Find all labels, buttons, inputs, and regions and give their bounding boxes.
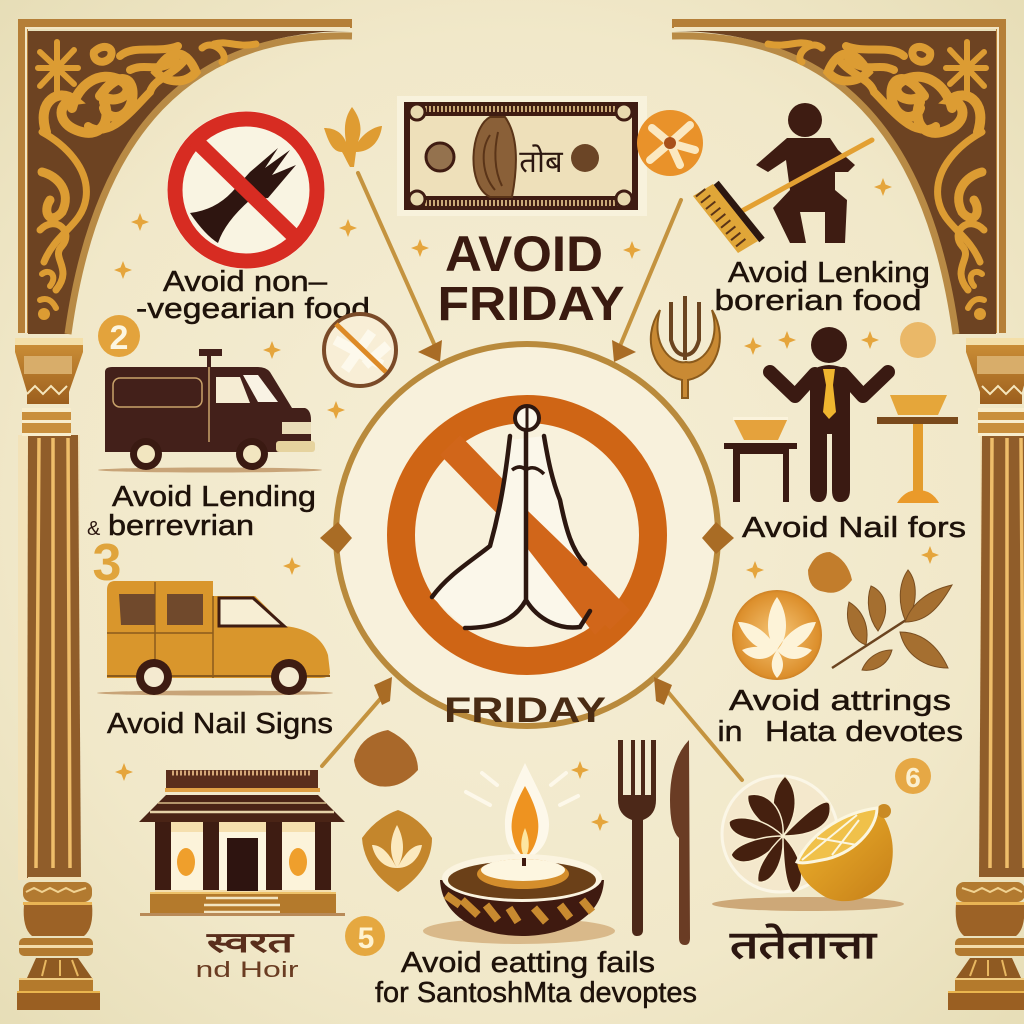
number 2 bbox=[98, 315, 140, 357]
icon: no non-veg fork bbox=[167, 111, 325, 269]
heading: AVOID FRIDAY bbox=[438, 226, 624, 331]
text: devanagari na hair: nd Hoir bbox=[196, 957, 298, 982]
decorative stars bbox=[114, 178, 939, 831]
icon: right table with bowl bbox=[877, 395, 958, 503]
icon: banknote: तोब bbox=[519, 144, 564, 179]
text: avoid lending bbox=[87, 481, 316, 542]
text: devanagari na hair bbox=[196, 927, 298, 982]
number 2: 2 bbox=[110, 319, 128, 357]
icon: no praying hands bbox=[401, 406, 653, 661]
icon: seed bbox=[354, 730, 418, 787]
text: avoid non-vegetarian: -vegearian food bbox=[136, 293, 370, 325]
text: devanagari right: ततेतात्ता bbox=[729, 923, 878, 967]
number 5: 5 bbox=[358, 922, 374, 955]
text: avoid lenking: borerian food bbox=[714, 285, 922, 317]
icon: leafy branch bbox=[832, 570, 952, 670]
icon: lotus badge bbox=[362, 810, 432, 892]
heading: AVOID FRIDAY: FRIDAY bbox=[438, 278, 624, 331]
icon: oil lamp bbox=[423, 763, 615, 944]
text: avoid eating bbox=[375, 947, 697, 1009]
icon: flower and lemon bbox=[712, 776, 904, 911]
central medallion bbox=[320, 340, 734, 730]
icon: banknote bbox=[397, 96, 647, 216]
icon: orange van bbox=[97, 581, 333, 696]
heading: AVOID FRIDAY: AVOID bbox=[445, 226, 603, 282]
text: avoid lenking bbox=[714, 257, 930, 317]
number 3: 3 bbox=[93, 534, 121, 592]
text: avoid lending: berrevrian bbox=[108, 510, 254, 542]
number 5 bbox=[345, 916, 385, 956]
text: avoid lenking: Avoid Lenking bbox=[728, 257, 930, 289]
icon: person sweeping bbox=[693, 103, 872, 253]
number 6 badge: 6 bbox=[905, 762, 921, 793]
text: avoid nail signs: Avoid Nail Signs bbox=[107, 708, 333, 740]
icon: halved fruit bbox=[732, 590, 822, 680]
icon: crossed plate bbox=[324, 314, 396, 386]
text: avoid eating: Avoid eatting fails bbox=[401, 947, 655, 979]
right column bbox=[948, 338, 1024, 1010]
icon: temple house bbox=[139, 770, 345, 916]
text: avoid attrings bbox=[718, 685, 963, 748]
text: avoid lending: & bbox=[87, 518, 101, 540]
text: avoid nail fors: Avoid Nail fors bbox=[742, 512, 966, 544]
text: avoid eating: for SantoshMta devoptes bbox=[375, 977, 697, 1009]
icon: knife bbox=[670, 740, 690, 945]
icon: trident bbox=[651, 296, 720, 398]
heading: FRIDAY: FRIDAY bbox=[444, 691, 606, 730]
icon: fork bbox=[618, 740, 656, 936]
icon: person with tie bbox=[770, 327, 888, 502]
text: avoid attrings: in bbox=[718, 716, 742, 748]
icon: sun badge bbox=[900, 322, 936, 358]
left column bbox=[15, 338, 100, 1010]
text: avoid lending: Avoid Lending bbox=[112, 481, 316, 513]
icon: dark van bbox=[98, 349, 322, 472]
number 6 badge bbox=[895, 758, 931, 794]
icon: dried flower bbox=[808, 552, 852, 593]
icon: lotus top bbox=[324, 107, 382, 167]
arch frame bbox=[18, 19, 1006, 334]
icon: left table with bowl bbox=[724, 417, 797, 502]
text: avoid attrings: Hata devotes bbox=[765, 716, 963, 748]
connector lines bbox=[322, 173, 742, 780]
text: avoid non-vegetarian bbox=[136, 266, 370, 325]
text: avoid attrings: Avoid attrings bbox=[729, 685, 951, 717]
icon: orange fruit slice bbox=[637, 110, 703, 176]
text: devanagari na hair: स्वरत bbox=[205, 927, 295, 958]
text: avoid non-vegetarian: Avoid non– bbox=[163, 266, 328, 298]
